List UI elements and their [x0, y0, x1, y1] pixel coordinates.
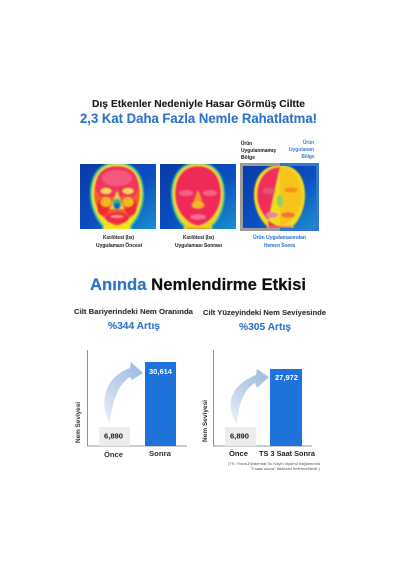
x label: after: Sonra [149, 449, 172, 458]
label: untreated area: Ürün [241, 140, 252, 147]
chart 2 heading [203, 308, 326, 333]
bar: after [145, 362, 176, 446]
thermal image: before [80, 162, 156, 232]
caption: before [96, 235, 143, 249]
frame: untreated side [240, 163, 280, 231]
caption: after [175, 235, 223, 249]
chart 1 heading: Cilt Bariyerindeki Nem Oranında [74, 307, 194, 316]
chart 2 heading: Cilt Yüzeyindeki Nem Seviyesinde [203, 308, 326, 317]
thermal image: after [160, 162, 236, 232]
label: untreated area: Bölge [241, 155, 255, 161]
thermal image: split comparison [240, 163, 319, 232]
arrow [231, 369, 269, 424]
caption: immediately after application: Hemen Sonra [264, 243, 295, 249]
label: treated area [289, 139, 315, 160]
label: treated area: Uygulanan [289, 147, 314, 153]
caption: after: Uygulaması Sonrası [175, 243, 223, 249]
label: untreated area: Uygulanmamış [241, 148, 276, 154]
x label: before: Önce [229, 449, 248, 458]
value: after: 27,972 [275, 373, 298, 382]
caption: immediately after application: Ürün Uygulamasından [253, 234, 306, 241]
bar: after [270, 369, 302, 446]
x label: after: TS 3 Saat Sonra [259, 449, 316, 458]
title [80, 98, 317, 126]
bar: before [99, 427, 130, 446]
chart 1 heading: %344 Artış [108, 321, 160, 332]
arrow [104, 362, 143, 424]
frame: treated side [280, 163, 319, 231]
y label: Nem Seviyesi [202, 400, 209, 442]
caption: immediately after application [253, 234, 306, 249]
axis [214, 350, 312, 446]
bar chart 1 [75, 350, 187, 459]
bar chart 2 [202, 350, 316, 458]
value: before: 6,890 [104, 432, 123, 440]
value: before: 6,890 [230, 432, 249, 440]
title: 2,3 Kat Daha Fazla Nemle Rahatlatma! [80, 111, 317, 126]
chart 2 heading: %305 Artış [239, 322, 291, 333]
axis [88, 350, 187, 446]
label: treated area: Bölge [302, 154, 315, 160]
footnote: "3 saat sonra" ifadesini belirtmektedir.) [250, 467, 320, 471]
x label: before: Önce [104, 450, 123, 459]
section heading: Anında Nemlendirme Etkisi [90, 276, 306, 294]
caption: before: Uygulaması Öncesi [96, 242, 143, 249]
value: after: 30,614 [149, 367, 173, 376]
title: Dış Etkenler Nedeniyle Hasar Görmüş Ciltte [92, 98, 305, 110]
footnote: (TS: Trans-Epidermal Su Kaybı ölçümü bağlamında [228, 462, 320, 466]
chart 1 heading [74, 307, 194, 332]
bar: before [225, 427, 256, 446]
footnote [228, 462, 320, 471]
label: untreated area [241, 140, 276, 161]
y label: Nem Seviyesi [75, 402, 82, 443]
caption: before: Kızılötesi (Isı) [103, 235, 134, 241]
caption: after: Kızılötesi (Isı) [183, 235, 214, 241]
label: treated area: Ürün [303, 139, 314, 146]
